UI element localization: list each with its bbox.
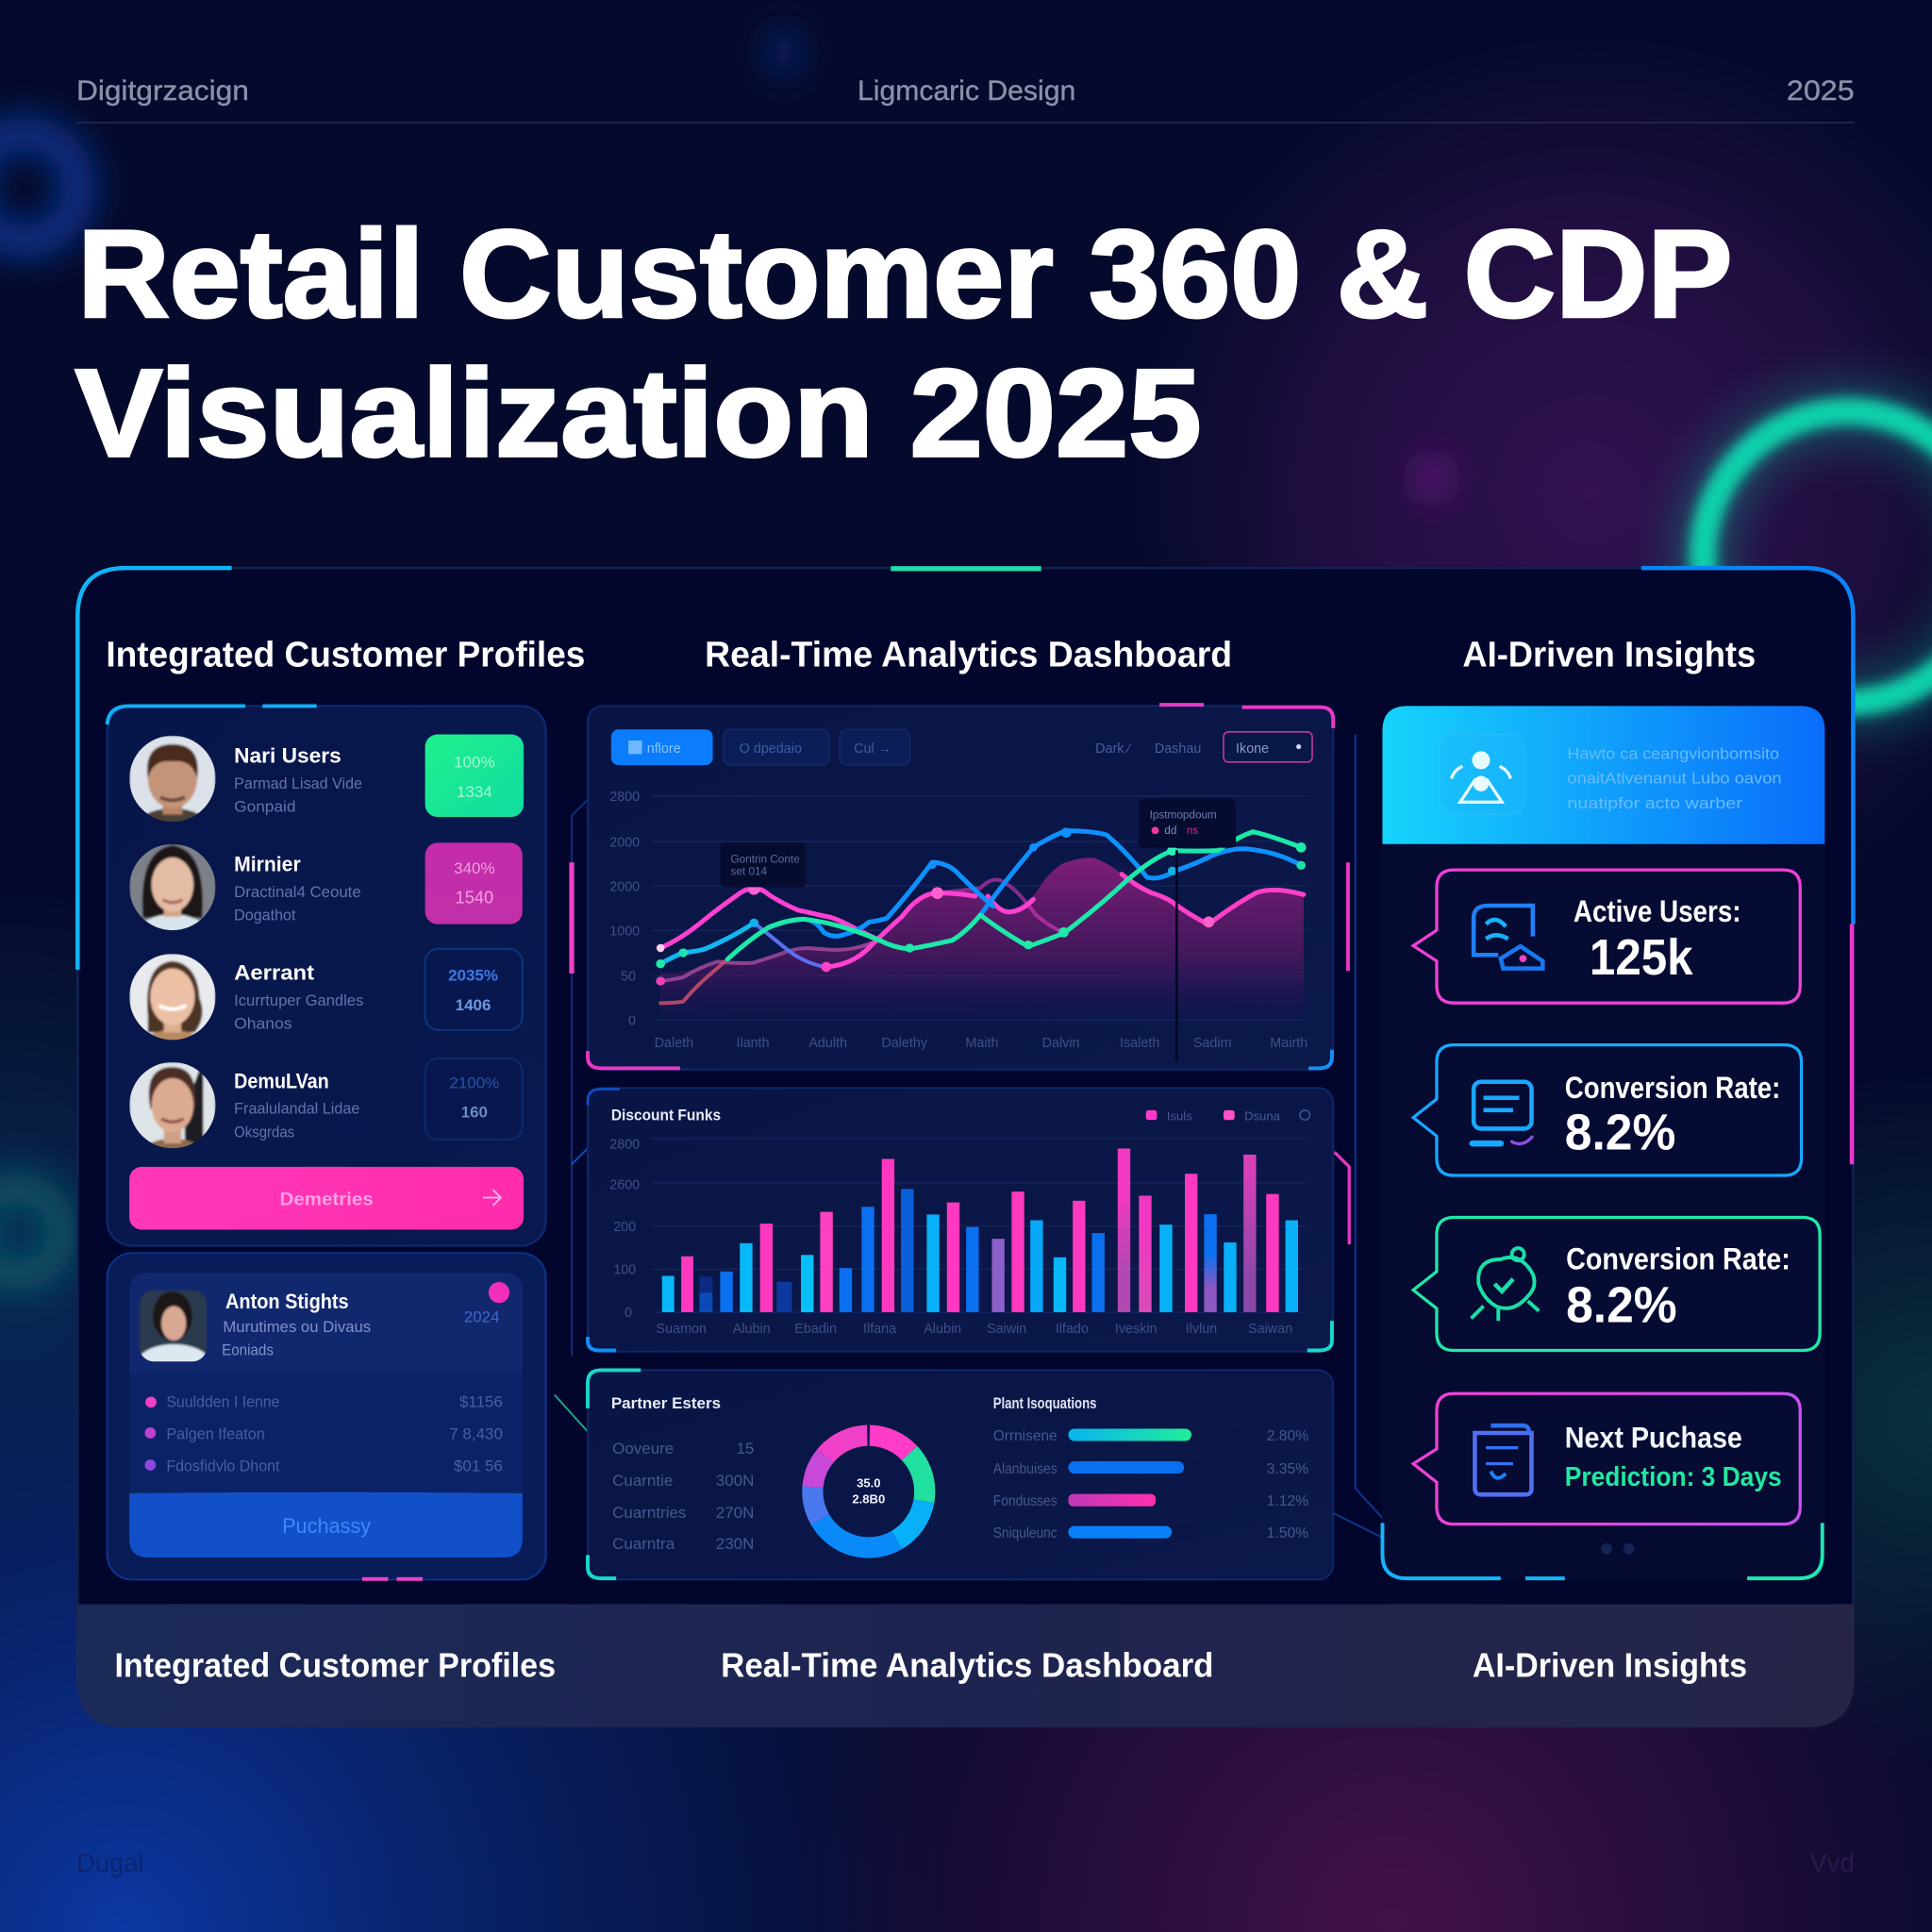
progress list: 1.50% — [1267, 1525, 1308, 1541]
panel: AI insights — [1382, 706, 1824, 1579]
grid and axis: Iveskin — [1115, 1322, 1158, 1337]
grid and axis: Saiwin — [987, 1322, 1026, 1337]
panel: customer profiles — [108, 706, 546, 1245]
progress list: Sniquleunc — [993, 1525, 1058, 1541]
chart grid and axis labels: 2000 — [609, 879, 640, 894]
stats list: 300N — [716, 1472, 754, 1490]
avatar: square portrait — [140, 1291, 208, 1362]
badge outline dim: 2100% — [449, 1074, 499, 1091]
progress list — [993, 1394, 1308, 1541]
callout: next purchase: Next Puchase — [1565, 1422, 1742, 1455]
bottom faint labels: Vvd — [1809, 1848, 1855, 1877]
bar chart title and legend: Isuls — [1167, 1108, 1192, 1123]
header bar: 2025 — [1787, 75, 1855, 107]
profile name and details 2: Mirnier — [234, 852, 301, 875]
badge green: 100% — [454, 754, 495, 772]
section headings — [106, 636, 1756, 675]
callout: next purchase — [1413, 1393, 1800, 1524]
stats list: 270N — [716, 1504, 754, 1522]
progress list: 1.12% — [1267, 1493, 1308, 1509]
badge outline — [425, 949, 523, 1030]
connector lines — [555, 734, 1382, 1538]
progress list: Plant Isoquations — [993, 1394, 1096, 1412]
chart toolbar: Cul → — [854, 741, 891, 757]
bar chart title and legend: Discount Funks — [611, 1106, 721, 1124]
grid and axis: Ilfana — [863, 1322, 896, 1337]
badge green — [425, 734, 524, 817]
chart grid and axis labels: 1000 — [609, 924, 640, 939]
chart cursor line — [1175, 850, 1178, 1062]
header text — [1567, 745, 1782, 812]
badge outline dim: 160 — [461, 1104, 488, 1122]
chart grid and axis labels: 50 — [621, 970, 636, 985]
badge magenta: 340% — [454, 859, 495, 877]
stats list: Partner Esters — [611, 1394, 721, 1412]
customer name and details: Eoniads — [222, 1341, 274, 1359]
chart grid and axis labels: Dalethy — [881, 1036, 928, 1051]
title — [75, 205, 1732, 482]
chart grid and axis labels: Dalvin — [1042, 1036, 1080, 1051]
bottom faint labels: Dugal — [76, 1848, 144, 1877]
grid and axis: Saiwan — [1248, 1322, 1292, 1337]
badge outline: 2035% — [448, 967, 498, 985]
chart toolbar: Dark ⁄ — [1095, 741, 1132, 757]
grid and axis: 200 — [613, 1220, 636, 1235]
footer strip: Integrated Customer Profiles — [114, 1646, 556, 1685]
stats list: Cuarntie — [612, 1472, 673, 1490]
transaction list: 7 8,430 — [449, 1425, 503, 1443]
grid and axis: 0 — [625, 1306, 632, 1321]
profile name and details 1 — [234, 743, 362, 816]
area: revenue — [660, 858, 1304, 1019]
stats list — [611, 1394, 754, 1553]
profile name and details 3 — [234, 960, 363, 1033]
chart grid and axis labels: Mairth — [1270, 1036, 1307, 1051]
chart grid and axis labels: Daleth — [655, 1036, 693, 1051]
avatar: male with brown hair — [129, 736, 216, 823]
avatar: woman with brown hair — [129, 954, 216, 1040]
grid and axis — [609, 1137, 1306, 1337]
grid and axis: 2800 — [609, 1137, 640, 1152]
section headings: Real-Time Analytics Dashboard — [705, 636, 1232, 675]
progress list: Fondusses — [993, 1493, 1058, 1509]
panel: line chart — [588, 705, 1333, 1070]
profile name and details 4: Fraalulandal Lidae — [234, 1100, 359, 1118]
donut chart: 2.8B0 — [852, 1491, 885, 1506]
callout: next purchase: Prediction: 3 Days — [1565, 1462, 1782, 1492]
panel: customer detail — [108, 1253, 546, 1581]
notification dot and year: 2024 — [464, 1307, 500, 1325]
header bar — [76, 75, 1855, 124]
bars — [662, 1148, 1298, 1312]
transaction list: Suuldden I Ienne — [166, 1393, 279, 1411]
profile name and details 1: Parmad Lisad Vide — [234, 774, 362, 792]
section headings: Integrated Customer Profiles — [106, 636, 585, 675]
grid and axis: Ebadin — [794, 1322, 837, 1337]
tooltip 2: ns — [1187, 824, 1198, 837]
avatar: woman with dark hair — [129, 843, 215, 930]
profile name and details 4: Oksgrdas — [234, 1124, 294, 1141]
button: demetries: Demetries — [279, 1189, 374, 1209]
chart grid and axis labels: Isaleth — [1120, 1036, 1159, 1051]
bar chart title and legend: Dsuna — [1244, 1108, 1281, 1123]
callout: active users: 125k — [1590, 930, 1693, 986]
button: demetries — [129, 1167, 524, 1230]
stats list: Cuarntries — [612, 1504, 686, 1522]
header card — [1382, 706, 1824, 844]
header text: onaitAtivenanut Lubo oavon — [1567, 770, 1782, 788]
customer name and details: Anton Stights — [225, 1290, 349, 1313]
stats list: 15 — [736, 1440, 754, 1457]
customer name and details — [222, 1290, 371, 1359]
header bar: Ligmcaric Design — [858, 75, 1075, 107]
progress list: Orrnisene — [993, 1428, 1058, 1444]
callout: conversion rate green: Conversion Rate: — [1566, 1241, 1790, 1275]
grid and axis: Ilvlun — [1186, 1322, 1217, 1337]
main dashboard panel — [76, 566, 1855, 1727]
footer strip: Real-Time Analytics Dashboard — [721, 1646, 1214, 1685]
data markers — [656, 827, 1307, 986]
chart toolbar — [611, 729, 1312, 765]
profile name and details 4 — [234, 1069, 359, 1141]
transaction list — [144, 1393, 503, 1475]
bar chart title and legend — [611, 1106, 1309, 1124]
profile name and details 1: Gonpaid — [234, 798, 295, 816]
progress list: Alanbuises — [993, 1461, 1058, 1477]
footer strip: AI-Driven Insights — [1473, 1646, 1747, 1685]
callout: conversion rate blue: 8.2% — [1565, 1106, 1675, 1161]
callout: conversion rate green — [1413, 1217, 1820, 1351]
transaction list: $01 56 — [454, 1457, 503, 1475]
chart toolbar: nflore — [647, 741, 681, 757]
chart grid and axis labels: Sadim — [1193, 1036, 1232, 1051]
grid and axis: Alubin — [733, 1322, 771, 1337]
callout: conversion rate green: 8.2% — [1566, 1277, 1677, 1333]
header text: nuatipfor acto warber — [1567, 794, 1742, 812]
line chart series — [656, 827, 1307, 1019]
grid and axis: Ilfado — [1056, 1322, 1089, 1337]
callout: active users — [1413, 870, 1800, 1003]
badge magenta — [425, 842, 523, 924]
chart toolbar: Ikone — [1236, 741, 1269, 757]
icon: AI avatar — [1452, 753, 1510, 802]
tooltip 2: Ipstmopdoum — [1150, 808, 1217, 821]
transaction list: Fdosfidvlo Dhont — [166, 1457, 280, 1475]
chart toolbar: O dpedaio — [740, 741, 802, 757]
header bar: Digitgrzacign — [76, 75, 249, 107]
notification dot and year — [464, 1282, 509, 1325]
donut chart: 35.0 — [857, 1475, 881, 1490]
donut chart — [812, 1436, 924, 1547]
title: Visualization 2025 — [75, 343, 1201, 482]
grid and axis: 100 — [613, 1263, 636, 1278]
icon: document report — [1473, 1082, 1533, 1143]
profile name and details 2 — [234, 852, 361, 924]
section headings: AI-Driven Insights — [1462, 636, 1756, 675]
profile name and details 3: Icurrtuper Gandles — [234, 991, 363, 1009]
chart grid and axis labels: 2000 — [609, 835, 640, 850]
pagination hearts — [1601, 1543, 1635, 1555]
profile name and details 2: Dractinal4 Ceoute — [234, 883, 361, 901]
transaction list: $1156 — [459, 1393, 503, 1411]
profile name and details 3: Ohanos — [234, 1015, 292, 1033]
panel: bar chart — [588, 1088, 1333, 1352]
icon: clipboard — [1474, 1425, 1532, 1494]
progress list: 3.35% — [1267, 1461, 1308, 1477]
callout: active users: Active Users: — [1574, 893, 1741, 928]
line: blue — [660, 831, 1301, 967]
profile name and details 4: DemuLVan — [234, 1069, 329, 1092]
header text: Hawto ca ceangvionbomsito — [1567, 745, 1779, 763]
badge outline: 1406 — [456, 996, 491, 1014]
chart grid and axis labels — [609, 790, 1307, 1051]
profile name and details 1: Nari Users — [234, 743, 341, 767]
grid and axis: Suamon — [657, 1322, 707, 1337]
chart grid and axis labels: 2800 — [609, 790, 640, 805]
icon: users profile — [1474, 906, 1542, 969]
title: Retail Customer 360 & CDP — [77, 205, 1732, 343]
line: green — [727, 832, 1301, 959]
chart grid and axis labels: Ilanth — [736, 1036, 770, 1051]
grid and axis: 2600 — [609, 1177, 640, 1192]
panel: partner stats — [588, 1370, 1333, 1579]
callout: conversion rate blue — [1413, 1045, 1802, 1175]
footer strip — [76, 1605, 1855, 1727]
badge magenta: 1540 — [456, 887, 493, 907]
callout: conversion rate blue: Conversion Rate: — [1565, 1070, 1780, 1105]
badge green: 1334 — [457, 783, 492, 801]
tooltip 1 — [720, 842, 806, 887]
profile name and details 2: Dogathot — [234, 907, 296, 924]
tooltip 1: set 014 — [731, 865, 768, 877]
stats list: 230N — [716, 1535, 754, 1553]
bottom accents — [362, 1577, 423, 1581]
chart grid and axis labels: Adulth — [808, 1036, 847, 1051]
badge outline dim — [425, 1058, 523, 1140]
customer name and details: Murutimes ou Divaus — [223, 1318, 371, 1336]
stats list: Cuarntra — [612, 1535, 675, 1553]
chart grid and axis labels: Maith — [965, 1036, 999, 1051]
tooltip 2 — [1139, 798, 1236, 848]
transaction list: Palgen Ifeaton — [166, 1425, 265, 1443]
stats list: Ooveure — [612, 1440, 674, 1457]
button: purchase: Puchassy — [282, 1514, 372, 1538]
chart grid and axis labels: 0 — [628, 1014, 636, 1029]
tooltip 1: Gontrin Conte — [731, 853, 800, 865]
avatar: woman with glasses — [129, 1062, 216, 1149]
bottom faint labels — [76, 1848, 1855, 1877]
tooltip 2: dd — [1164, 824, 1176, 837]
icon: shield check — [1472, 1248, 1539, 1321]
profile name and details 3: Aerrant — [234, 960, 315, 984]
line: pink primary — [660, 874, 1304, 1003]
progress list: 2.80% — [1267, 1428, 1308, 1444]
chart toolbar: Dashau — [1155, 741, 1201, 757]
grid and axis: Alubin — [924, 1322, 961, 1337]
